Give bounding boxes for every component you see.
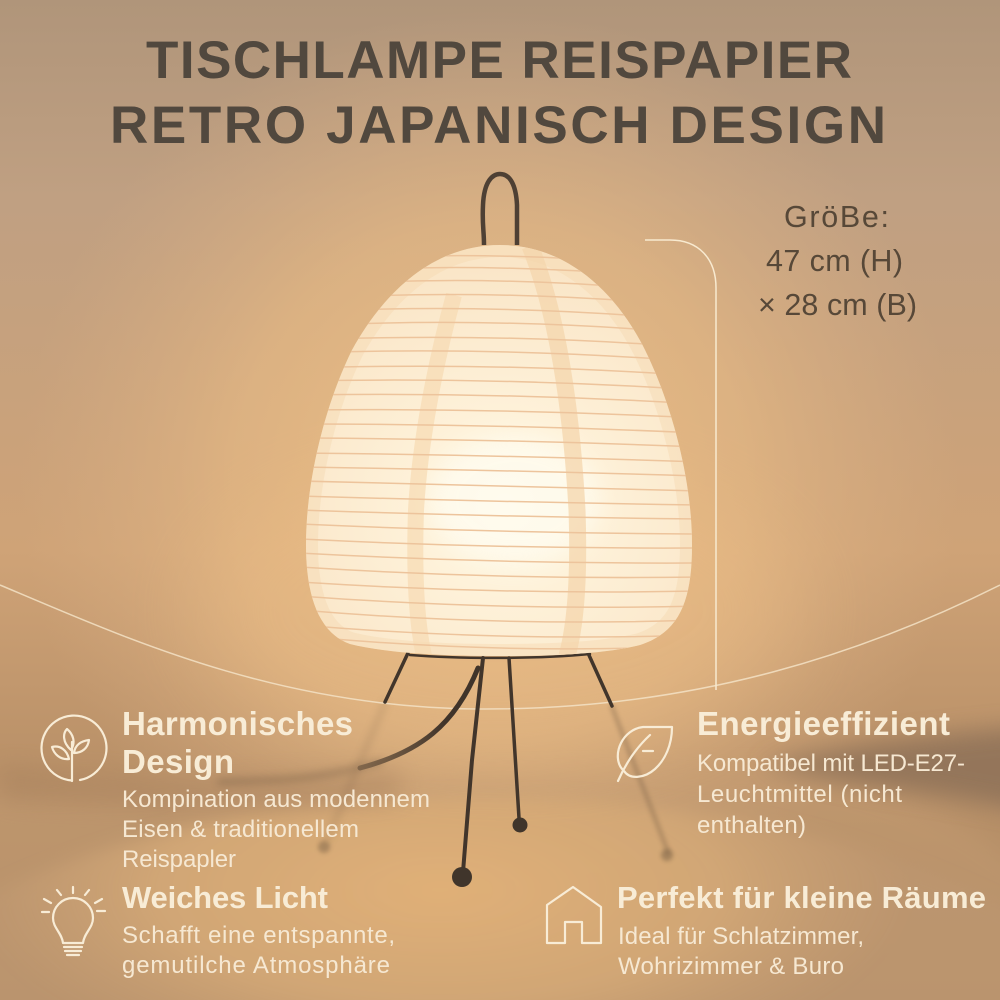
- feature: Weiches Licht: [42, 880, 395, 979]
- heading: Weiches Licht: [122, 880, 328, 915]
- description: [697, 750, 965, 839]
- size label: [758, 200, 917, 322]
- title: TISCHLAMPE REISPAPIER: [146, 31, 852, 90]
- description: gemutilche Atmosphäre: [122, 952, 390, 979]
- lamp tripod legs: [220, 653, 612, 887]
- description: Leuchtmittel (nicht: [697, 781, 902, 808]
- lamp: [220, 174, 700, 887]
- icon: house: [547, 887, 601, 943]
- description: Ideal für Schlatzimmer,: [618, 923, 864, 950]
- icon: leaf: [618, 727, 672, 781]
- icon: plant in circle: [41, 716, 106, 781]
- size label: 47 cm (H): [766, 244, 903, 278]
- vertical paper bands: [415, 295, 454, 656]
- description: Kompination aus modennem: [122, 786, 430, 813]
- size label: × 28 cm (B): [758, 288, 917, 322]
- horizontal ribs: [300, 256, 700, 649]
- heading: [122, 705, 353, 780]
- description: [122, 922, 395, 979]
- lamp handle: [483, 174, 517, 245]
- icon: light bulb: [42, 887, 105, 955]
- feature: Energieeffizient: [618, 705, 965, 839]
- description: enthalten): [697, 812, 806, 839]
- lamp paper shade: [300, 240, 700, 660]
- description: Wohrizimmer & Buro: [618, 953, 844, 980]
- feature: Perfekt für kleine Räume: [547, 880, 986, 980]
- feature: Harmonisches Design: [41, 705, 430, 873]
- size bracket line: [645, 240, 716, 690]
- description: Kompatibel mit LED-E27-: [697, 750, 965, 777]
- heading: Perfekt für kleine Räume: [617, 880, 986, 915]
- curved floor line: [0, 585, 1000, 709]
- heading: Energieeffizient: [697, 705, 950, 742]
- description: Reispapler: [122, 846, 236, 873]
- description: Eisen & traditionellem: [122, 816, 359, 843]
- description: [122, 786, 430, 873]
- title: RETRO JAPANISCH DESIGN: [110, 96, 886, 155]
- size label: GröBe:: [784, 200, 889, 234]
- heading: Harmonisches: [122, 705, 353, 742]
- title: [110, 31, 886, 155]
- description: [618, 923, 864, 980]
- description: Schafft eine entspannte,: [122, 922, 395, 949]
- floor shadows of lamp legs: [318, 703, 673, 861]
- heading: Design: [122, 743, 234, 780]
